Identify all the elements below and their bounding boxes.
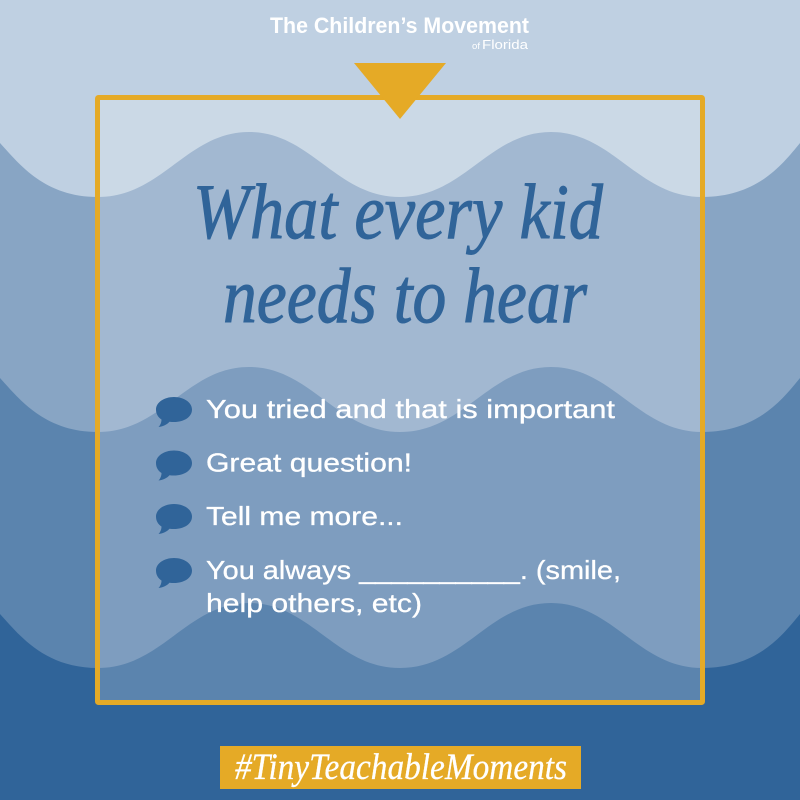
- title: needs to hear: [223, 252, 588, 339]
- logo: The Children's Movement of Florida: [270, 13, 530, 52]
- icon: speech bubble: [156, 397, 192, 427]
- phrase 1: [156, 394, 616, 427]
- icon: speech bubble: [156, 450, 192, 480]
- phrase 4: [156, 555, 621, 618]
- logo: The Children's Movement of Florida: of: [472, 41, 481, 51]
- phrase 4: help others, etc): [206, 588, 422, 618]
- icon: speech bubble: [156, 558, 192, 588]
- icon: speech bubble: [156, 504, 192, 534]
- logo: The Children's Movement of Florida: Florida: [482, 37, 529, 52]
- phrase 4: You always __________. (smile,: [206, 555, 621, 585]
- phrase 2: Great question!: [206, 448, 412, 478]
- phrase 2: [156, 448, 412, 480]
- list of phrases: [156, 394, 621, 618]
- translucent panel: [100, 100, 700, 700]
- gold frame: [98, 98, 702, 702]
- hashtag banner: #TinyTeachableMoments: [235, 747, 567, 788]
- logo: The Children's Movement of Florida: The Children’s Movement: [270, 13, 530, 38]
- phrase 3: [156, 501, 403, 534]
- title: What every kid: [193, 168, 604, 255]
- gold triangle marker: [354, 63, 446, 119]
- phrase 1: You tried and that is important: [206, 394, 616, 424]
- phrase 3: Tell me more...: [206, 501, 403, 531]
- title: [193, 168, 604, 339]
